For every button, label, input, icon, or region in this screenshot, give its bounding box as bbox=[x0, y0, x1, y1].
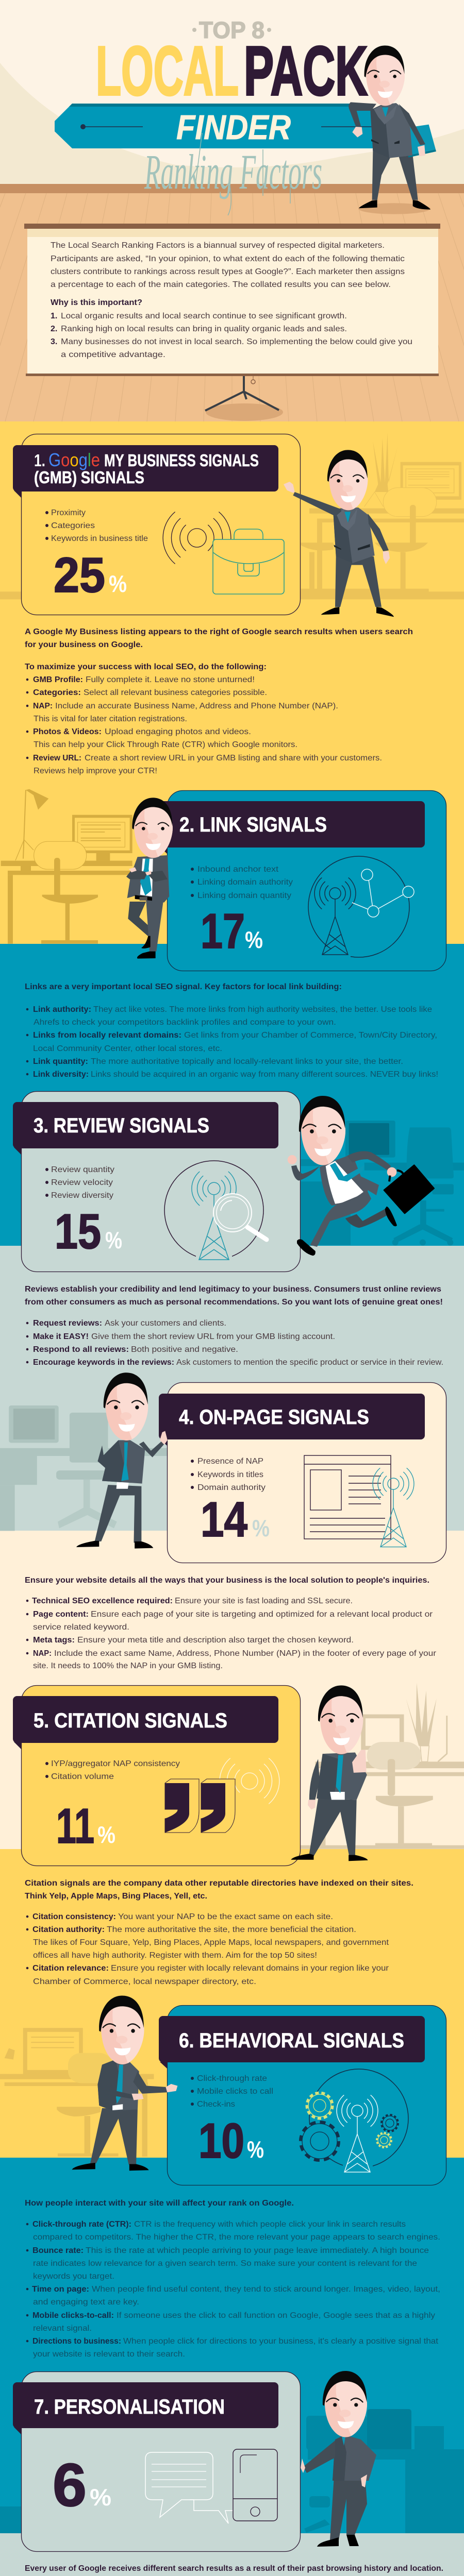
bullet list: CTR is the frequency with which people click your link in search results bbox=[134, 2220, 406, 2229]
factor list: Proximity bbox=[51, 509, 86, 517]
panel: 2 link signals bbox=[159, 790, 446, 971]
percentage 6 bbox=[53, 2451, 111, 2519]
factor list: Linking domain quantity bbox=[197, 891, 291, 900]
bullet list: rate indicates low relevance for a given search term. So make sure your content is relevant for the bbox=[33, 2259, 417, 2268]
factor list: Linking domain authority bbox=[197, 878, 293, 887]
intro paragraph: Citation signals are the company data other reputable directories have indexed on their sites. bbox=[25, 1879, 413, 1888]
background: section 1 yellow bbox=[0, 421, 464, 944]
bullet list: Ensure your meta title and description also target the chosen keyword. bbox=[77, 1636, 354, 1645]
title block bbox=[55, 17, 373, 215]
percentage 10: 10 bbox=[198, 2113, 244, 2168]
icon: web page and tower bbox=[304, 1455, 414, 1547]
bullet list: Both positive and negative. bbox=[131, 1345, 238, 1354]
card outline bbox=[167, 790, 446, 971]
header fold bbox=[160, 1439, 167, 1446]
icon: gears and tower bbox=[301, 2069, 408, 2174]
bullet list: Link quantity: bbox=[33, 1057, 88, 1066]
why important list: Ranking high on local results can bring in quality organic leads and sales. bbox=[61, 325, 347, 333]
bullet list: site. It needs to 100% the NAP in your GMB listing. bbox=[33, 1662, 223, 1670]
bullet list: When people click for directions to your business, it's clearly a positive signal that bbox=[123, 2337, 439, 2346]
bullet list: Ahrefs to check your competitors backlink profiles and compare to your own. bbox=[34, 1018, 336, 1027]
factor list bbox=[191, 1457, 266, 1492]
text: section 1 details bbox=[25, 628, 413, 775]
intro text: a percentage to each of the main categories. The collated results you can see below. bbox=[51, 280, 391, 289]
screen surface bbox=[27, 229, 438, 374]
text: section 2 details bbox=[25, 982, 438, 1079]
background: section 7 pale bbox=[0, 2533, 464, 2576]
factor list: Categories bbox=[51, 521, 95, 530]
bullet list: your website is relevant to their search. bbox=[33, 2350, 185, 2359]
heading: 4. ON-PAGE SIGNALS bbox=[179, 1406, 369, 1429]
intro paragraph: Reviews establish your credibility and lend legitimacy to your business. Consumers trust online reviews bbox=[25, 1285, 441, 1294]
figure: man hand on panel bbox=[301, 2371, 376, 2547]
bullet list: Categories: bbox=[33, 688, 81, 697]
percentage 14: 14 bbox=[201, 1492, 247, 1547]
bullet list: The more authoritative the site, the more beneficial the citation. bbox=[107, 1925, 356, 1934]
bullet list bbox=[26, 2220, 440, 2359]
factor list: Mobile clicks to call bbox=[197, 2087, 273, 2096]
bullet list: They act like votes. The more links from high authority websites, the better. Use tools like bbox=[93, 1005, 432, 1014]
intro paragraph bbox=[25, 628, 413, 671]
header fold bbox=[160, 2062, 167, 2069]
bullet list: This can help your Click Through Rate (CTR) which Google monitors. bbox=[34, 740, 297, 749]
header fold bbox=[14, 2427, 21, 2434]
title: finder banner bbox=[55, 104, 373, 148]
factor list bbox=[45, 1759, 180, 1781]
office scene: section 4 bbox=[0, 1405, 169, 1531]
icon: chat bubbles and phone bbox=[145, 2449, 277, 2523]
icon: signal and briefcase bbox=[163, 512, 284, 594]
factor list bbox=[191, 865, 293, 900]
panel: 1 GMB signals bbox=[13, 434, 300, 615]
bullet list: Select all relevant business categories possible. bbox=[84, 688, 267, 697]
bullet list: The likes of Four Square, Yelp, Bing Places, Apple Maps, local newspapers, and government bbox=[33, 1938, 389, 1947]
bullet list: GMB Profile: bbox=[33, 675, 83, 684]
bullet list: Create a short review URL in your GMB listing and share with your customers. bbox=[85, 754, 382, 762]
heading: 6. BEHAVIORAL SIGNALS bbox=[179, 2029, 404, 2052]
card outline bbox=[22, 2372, 300, 2551]
intro text: Participants are asked, “In your opinion, to what extent do each of the following thematic bbox=[51, 255, 405, 263]
panel: 6 behavioral signals bbox=[159, 2005, 446, 2185]
factor list bbox=[45, 509, 148, 543]
header bar bbox=[159, 1394, 425, 1439]
background: wooden floor bbox=[0, 193, 464, 421]
heading: 7. PERSONALISATION bbox=[34, 2396, 225, 2418]
screen bottom bar bbox=[26, 374, 439, 376]
bullet list bbox=[26, 675, 382, 775]
title: top 8: TOP 8 bbox=[199, 17, 264, 43]
bullet list: and engaging text are key. bbox=[33, 2298, 139, 2307]
text: section 4 details bbox=[25, 1576, 437, 1670]
header fold bbox=[14, 1742, 21, 1749]
text: section 5 details bbox=[25, 1879, 413, 1986]
heading: 5. CITATION SIGNALS bbox=[34, 1709, 227, 1732]
percentage 15: 15 bbox=[55, 1204, 101, 1259]
background: hero wall bbox=[0, 0, 464, 184]
bullet list: Make it EASY! bbox=[33, 1332, 89, 1341]
text: section 6 details bbox=[25, 2199, 440, 2359]
card outline bbox=[167, 2005, 446, 2185]
figure: man leaning arms crossed bbox=[126, 798, 173, 959]
office scene: section 7 bbox=[0, 2409, 464, 2533]
bullet list: Links should be acquired in an organic way from many different sources. NEVER buy links! bbox=[91, 1070, 438, 1079]
bullet list bbox=[26, 1005, 438, 1079]
bullet list: NAP: bbox=[33, 702, 53, 710]
percentage 25: 25 bbox=[54, 548, 105, 603]
background: section 3 pale bbox=[0, 1246, 464, 1531]
figure: man waving bbox=[284, 450, 394, 617]
intro paragraph bbox=[25, 1879, 413, 1901]
bullet list: offices all have high authority. Register with them. Aim for the top 50 sites! bbox=[33, 1951, 317, 1960]
intro sentence: Ensure your website details all the ways that your business is the local solution to people's inquiries. bbox=[25, 1576, 429, 1585]
intro text: The Local Search Ranking Factors is a biannual survey of respected digital marketers. bbox=[51, 241, 385, 250]
heading: (GMB) SIGNALS bbox=[34, 468, 144, 487]
bullet list: service related keyword. bbox=[33, 1623, 129, 1632]
panel: projector screen bbox=[24, 224, 440, 421]
why important list: Local organic results and local search continue to see significant growth. bbox=[61, 312, 347, 320]
bullet list: Citation authority: bbox=[32, 1925, 105, 1934]
percentage 6: % bbox=[90, 2484, 111, 2511]
intro paragraph: A Google My Business listing appears to the right of Google search results when users search bbox=[25, 628, 413, 636]
header bar bbox=[13, 1696, 278, 1743]
factor list: Inbound anchor text bbox=[197, 865, 279, 874]
projector rod bbox=[24, 224, 440, 229]
panel: 7 personalisation bbox=[13, 2372, 300, 2551]
title: ranking factors script bbox=[144, 133, 322, 215]
bullet list: Mobile clicks-to-call: bbox=[32, 2311, 114, 2320]
percentage 6: 6 bbox=[53, 2451, 87, 2519]
background: floor boards bbox=[0, 193, 464, 421]
bullet list: This is vital for later citation registrations. bbox=[34, 715, 187, 723]
bullet list bbox=[26, 1319, 443, 1367]
why important list: Many businesses do not invest in local search. So implementing the below could give you bbox=[61, 337, 412, 346]
bullet list: If someone uses the click to call function on Google, Google sees that as a highly bbox=[117, 2311, 435, 2320]
intro paragraph: To maximize your success with local SEO, do the following: bbox=[25, 663, 267, 671]
office scene: section 1 bbox=[0, 433, 464, 599]
bullet list: Fully complete it. Leave no stone unturned! bbox=[86, 675, 255, 684]
bullet list: relevant signal. bbox=[33, 2324, 92, 2333]
projector stand bbox=[205, 376, 283, 421]
bullet list: Give them the short review URL from your GMB listing account. bbox=[91, 1332, 335, 1341]
figure: man pointing right bbox=[72, 1995, 177, 2171]
factor list: IYP/aggregator NAP consistency bbox=[51, 1759, 180, 1768]
header fold bbox=[14, 1147, 21, 1155]
factor list: Keywords in titles bbox=[197, 1470, 263, 1479]
bullet list: Click-through rate (CTR): bbox=[32, 2220, 131, 2229]
bullet list: Respond to all reviews: bbox=[33, 1345, 129, 1354]
bullet list: Links from locally relevant domains: bbox=[33, 1031, 181, 1040]
bullet list: You want your NAP to be the exact same on each site. bbox=[118, 1912, 333, 1921]
factor list: Presence of NAP bbox=[197, 1457, 263, 1466]
bullet list: Meta tags: bbox=[33, 1636, 75, 1645]
icon: network tower bbox=[308, 856, 414, 957]
bullet list: The more authoritative topically and locally-relevant links to your site, the better. bbox=[91, 1057, 403, 1066]
bullet list: Ensure you register with locally relevant domains in your region like your bbox=[111, 1964, 389, 1973]
factor list: Check-ins bbox=[197, 2100, 235, 2109]
why important list: a competitive advantage. bbox=[61, 350, 165, 359]
percentage 10: % bbox=[247, 2136, 264, 2163]
heading: Google bbox=[48, 449, 100, 470]
percentage 17: 17 bbox=[201, 904, 245, 959]
why important list: 2. bbox=[51, 325, 57, 333]
header bar bbox=[13, 445, 278, 492]
background: section 4 cream bbox=[0, 1531, 464, 1849]
intro text: clusters contribute to rankings across result types at Google?”. Each marketer then assigns bbox=[51, 267, 405, 276]
header fold bbox=[160, 847, 167, 854]
bullet list: Chamber of Commerce, local newspaper directory, etc. bbox=[33, 1977, 256, 1986]
header fold bbox=[14, 490, 21, 498]
bullet list: Reviews help improve your CTR! bbox=[34, 767, 157, 775]
card outline bbox=[167, 1383, 446, 1563]
intro paragraph: for your business on Google. bbox=[25, 640, 143, 649]
heading: MY BUSINESS SIGNALS bbox=[104, 451, 259, 470]
bullet list: Link diversity: bbox=[33, 1070, 89, 1079]
heading: 1. bbox=[34, 451, 45, 470]
bullet list: Review URL: bbox=[33, 754, 81, 762]
figure: presenter with book bbox=[349, 45, 436, 214]
background: hero wall light curve bbox=[0, 0, 464, 167]
bullet list: Citation consistency: bbox=[32, 1912, 116, 1921]
bullet list: Photos & Videos: bbox=[33, 727, 102, 736]
factor list: Review velocity bbox=[51, 1178, 113, 1187]
bullet list: keywords you target. bbox=[33, 2272, 114, 2281]
background: section 5 yellow bbox=[0, 1849, 464, 2158]
title: local: LOCAL bbox=[96, 32, 239, 110]
background: section 2 teal bbox=[0, 944, 464, 1246]
title: finder banner: FINDER bbox=[176, 108, 291, 147]
header bar bbox=[159, 2016, 425, 2062]
factor list: Domain authority bbox=[197, 1483, 266, 1492]
card outline bbox=[22, 1091, 300, 1272]
percentage 11: % bbox=[97, 1821, 115, 1848]
factor list: Review diversity bbox=[51, 1191, 113, 1200]
intro sentence: Links are a very important local SEO signal. Key factors for local link building: bbox=[25, 982, 342, 991]
bullet list: Link authority: bbox=[33, 1005, 91, 1014]
card outline bbox=[22, 1686, 300, 1866]
bullet list: Ensure your site is fast loading and SSL secure. bbox=[175, 1597, 353, 1605]
panel: 5 citation signals bbox=[13, 1686, 300, 1866]
heading bbox=[34, 449, 259, 487]
figure: man thumbs up bbox=[291, 1685, 368, 1861]
screen top shade bbox=[27, 229, 438, 237]
icon: magnifier and tower bbox=[164, 1161, 267, 1261]
bullet list: Technical SEO excellence required: bbox=[32, 1597, 173, 1605]
heading: 3. REVIEW SIGNALS bbox=[34, 1114, 209, 1137]
bullet list: This is the rate at which people arriving to your page leave immediately. A high bounce bbox=[86, 2246, 429, 2255]
factor list: Review quantity bbox=[51, 1165, 114, 1174]
intro text bbox=[51, 241, 405, 289]
heading: 2. LINK SIGNALS bbox=[179, 814, 327, 836]
intro paragraph bbox=[25, 1285, 443, 1307]
figure: man presenting bbox=[76, 1372, 168, 1549]
bullet list: Page content: bbox=[33, 1610, 89, 1619]
bullet list: Get links from your Chamber of Commerce, Town/City Directory, bbox=[184, 1031, 437, 1040]
panel: 4 on-page signals bbox=[159, 1383, 446, 1563]
factor list: Keywords in business title bbox=[51, 534, 148, 543]
figure: man running with briefcase bbox=[288, 1096, 434, 1256]
factor list: Click-through rate bbox=[197, 2074, 267, 2083]
office scene: section 6 bbox=[0, 2028, 154, 2157]
why important list bbox=[51, 298, 412, 359]
percentage 14: % bbox=[252, 1515, 270, 1541]
percentage 15: % bbox=[105, 1227, 122, 1253]
intro paragraph: Think Yelp, Apple Maps, Bing Places, Yell, etc. bbox=[25, 1892, 207, 1901]
bullet list bbox=[26, 1912, 389, 1986]
header bar bbox=[159, 801, 425, 848]
bullet list: Ensure each page of your site is targeting and optimized for a relevant local product or bbox=[91, 1610, 433, 1619]
bullet list: Encourage keywords in the reviews: bbox=[33, 1358, 174, 1367]
why important list: 3. bbox=[51, 337, 57, 346]
text: section 3 details bbox=[25, 1285, 443, 1367]
percentage 11: 11 bbox=[56, 1799, 94, 1854]
why important list: 1. bbox=[51, 312, 57, 320]
bullet list: Ask your customers and clients. bbox=[105, 1319, 226, 1328]
bullet list: Local Community Center, other local stores, etc. bbox=[33, 1044, 222, 1053]
bullet list: NAP: bbox=[33, 1649, 52, 1658]
percentage 17: % bbox=[245, 926, 263, 953]
intro paragraph: from other consumers as much as personal recommendations. So you want lots of genuine great ones! bbox=[25, 1298, 443, 1307]
background: section 6 teal bbox=[0, 2158, 464, 2533]
office scene: section 2 bbox=[1, 789, 133, 944]
icon: quotation marks bbox=[165, 1758, 279, 1833]
bullet list: Ask customers to mention the specific product or service in their review. bbox=[176, 1358, 443, 1367]
header bar bbox=[13, 2382, 278, 2428]
factor list bbox=[191, 2074, 273, 2109]
why important list: Why is this important? bbox=[51, 298, 142, 307]
header bar bbox=[13, 1102, 278, 1148]
panel: 3 review signals bbox=[13, 1091, 300, 1272]
bullet list: Time on page: bbox=[32, 2285, 89, 2294]
office scene: section 3 bbox=[301, 1121, 464, 1246]
office scene: section 5 bbox=[296, 1683, 464, 1849]
card outline bbox=[22, 434, 300, 615]
bullet list: When people find useful content, they tend to stick around longer. Images, video, layout, bbox=[92, 2285, 440, 2294]
bullet list: Directions to business: bbox=[32, 2337, 121, 2346]
title: pack: PACK bbox=[244, 32, 368, 110]
percentage 25: % bbox=[109, 570, 127, 597]
bullet list: Bounce rate: bbox=[32, 2246, 84, 2255]
bullet list: Upload engaging photos and videos. bbox=[105, 727, 251, 736]
intro sentence: Every user of Google receives different search results as a result of their past browsing history and location. bbox=[25, 2564, 443, 2573]
bullet list: compared to competitors. The higher the CTR, the more relevant your page appears to search engines. bbox=[33, 2233, 440, 2242]
bullet list: Request reviews: bbox=[33, 1319, 102, 1328]
bullet list bbox=[26, 1597, 437, 1670]
bullet list: Include the exact same Name, Address, Phone Number (NAP) in the footer of every page of your bbox=[54, 1649, 437, 1658]
intro sentence: How people interact with your site will affect your rank on Google. bbox=[25, 2199, 294, 2208]
factor list bbox=[45, 1165, 114, 1200]
factor list: Citation volume bbox=[51, 1772, 114, 1781]
bullet list: Citation relevance: bbox=[32, 1964, 109, 1973]
background: skirting board bbox=[0, 184, 464, 193]
bullet list: Include an accurate Business Name, Address and Phone Number (NAP). bbox=[55, 702, 338, 710]
